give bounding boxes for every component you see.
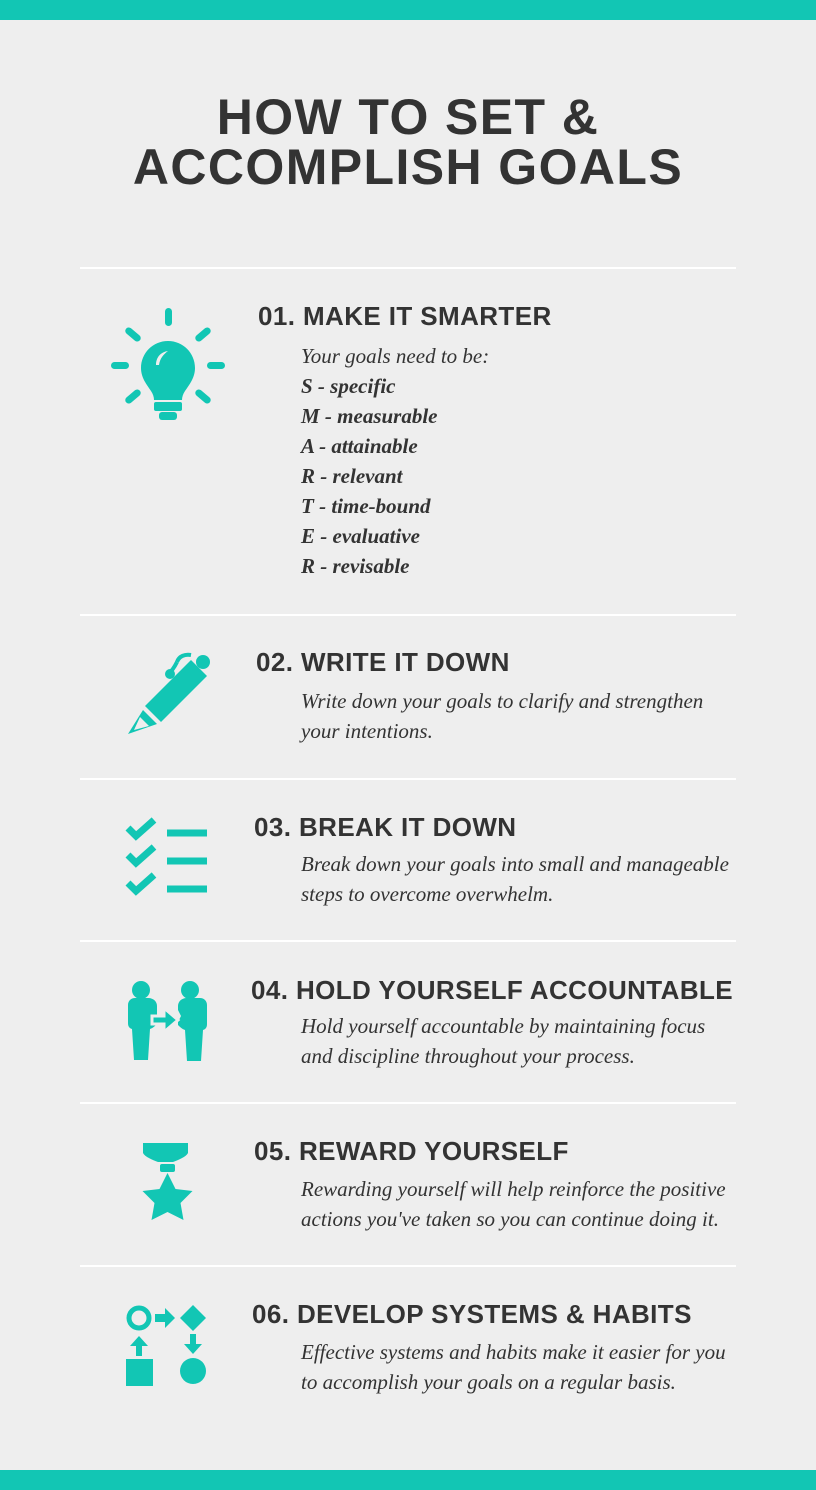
text 02: your intentions. [301,719,433,743]
title [133,89,683,195]
icon: process flow [126,1305,206,1386]
heading 06: 06. DEVELOP SYSTEMS & HABITS [252,1299,692,1329]
heading 04: 04. HOLD YOURSELF ACCOUNTABLE [251,975,733,1005]
text 05 [300,1177,726,1231]
text 06 [300,1340,726,1394]
text 01: T - time-bound [301,494,430,518]
heading 03: 03. BREAK IT DOWN [254,812,516,842]
text 01 [300,344,489,578]
title: ACCOMPLISH GOALS [133,139,683,195]
text 01: E - evaluative [301,524,420,548]
text 01: A - attainable [301,434,418,458]
icon: light bulb [111,308,225,420]
text 05: actions you've taken so you can continue doing it. [301,1207,719,1231]
text 03 [301,852,729,906]
text 01: R - revisable [301,554,409,578]
text 02 [299,689,703,743]
heading 02: 02. WRITE IT DOWN [256,647,510,677]
text 03: Break down your goals into small and manageable [301,852,729,876]
title: HOW TO SET & [217,89,599,145]
text 05: Rewarding yourself will help reinforce the positive [301,1177,726,1201]
icon: pen [128,652,210,734]
icon: medal [142,1143,192,1220]
text 02: Write down your goals to clarify and strengthen [301,689,703,713]
icon: checklist [126,817,207,896]
heading 05: 05. REWARD YOURSELF [254,1136,569,1166]
text 06: Effective systems and habits make it easier for you [301,1340,726,1364]
icon: people exchange [128,981,207,1061]
text 01: M - measurable [301,404,438,428]
text 01: Your goals need to be: [301,344,489,368]
text 03: steps to overcome overwhelm. [301,882,553,906]
text 04 [300,1014,705,1068]
heading 01: 01. MAKE IT SMARTER [258,301,552,331]
text 06: to accomplish your goals on a regular basis. [301,1370,676,1394]
text 01: S - specific [301,374,395,398]
text 04: and discipline throughout your process. [301,1044,635,1068]
text 01: R - relevant [301,464,402,488]
text 04: Hold yourself accountable by maintaining focus [301,1014,705,1038]
